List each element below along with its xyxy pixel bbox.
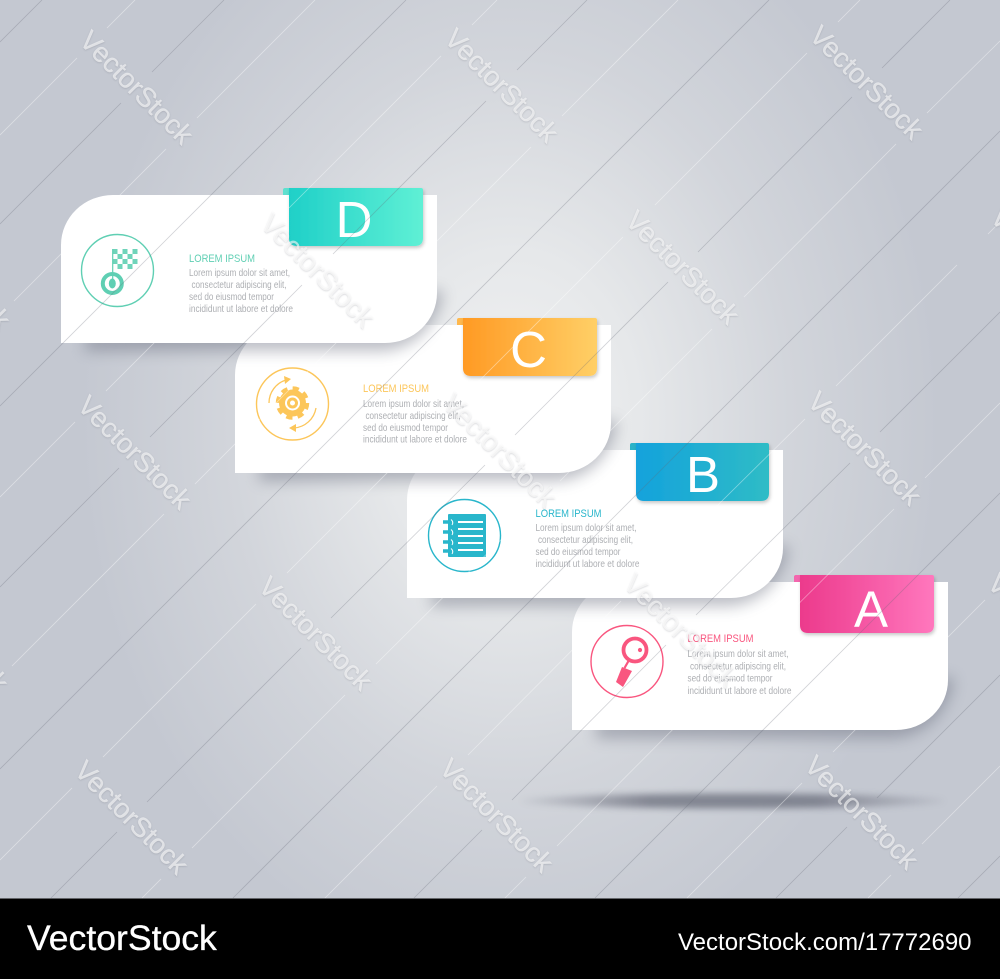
- panel: step D: [61, 188, 443, 351]
- card C shadow: [259, 420, 617, 481]
- text block C: [363, 383, 467, 446]
- footer image id: VectorStock.com/17772690: [678, 929, 972, 956]
- watermarks: VectorStock: [434, 753, 560, 878]
- text block D: Lorem ipsum dolor sit amet,: [189, 267, 290, 279]
- icon: checkered flag: [82, 234, 154, 306]
- text block A: [688, 633, 792, 697]
- watermarks: VectorStock: [802, 386, 928, 511]
- watermarks: VectorStock: [69, 755, 195, 880]
- card D body: [61, 195, 437, 343]
- footer logo: VectorStock: [27, 918, 217, 958]
- floating ground shadow: [521, 794, 945, 808]
- text block B: LOREM IPSUM: [536, 508, 602, 520]
- text block A: incididunt ut labore et dolore: [688, 685, 792, 697]
- watermarks: VectorStock: [439, 23, 565, 148]
- text block C: Lorem ipsum dolor sit amet,: [363, 398, 464, 410]
- tab C: C: [510, 321, 547, 378]
- watermarks: VectorStock: [620, 205, 746, 330]
- text block A: consectetur adipiscing elit,: [690, 660, 786, 672]
- text block B: [536, 508, 640, 570]
- text block D: sed do eiusmod tempor: [189, 291, 274, 303]
- text block A: sed do eiusmod tempor: [688, 672, 773, 684]
- icon: magnifying glass: [591, 626, 663, 698]
- card C body: [235, 325, 611, 473]
- panel: step C: [235, 318, 617, 481]
- text block B: Lorem ipsum dolor sit amet,: [536, 522, 636, 534]
- watermarks: VectorStock: [804, 20, 930, 145]
- card D shadow: [85, 290, 443, 351]
- text block C: LOREM IPSUM: [363, 383, 429, 395]
- card A body: [572, 582, 948, 730]
- watermarks: VectorStock: [72, 390, 198, 515]
- tab A: [794, 575, 934, 638]
- text block C: consectetur adipiscing elit,: [366, 410, 460, 422]
- watermarks: VectorStock: [618, 568, 744, 693]
- text block D: [189, 253, 293, 315]
- text block B: sed do eiusmod tempor: [536, 546, 621, 558]
- watermarks: VectorStock: [253, 571, 379, 696]
- text block C: sed do eiusmod tempor: [363, 422, 448, 434]
- text block D: LOREM IPSUM: [189, 253, 255, 265]
- icon: notebook: [428, 500, 500, 572]
- watermarks: VectorStock: [74, 25, 200, 150]
- text block D: incididunt ut labore et dolore: [189, 303, 293, 315]
- tab B: B: [686, 446, 720, 503]
- panel: step A: [572, 575, 954, 738]
- card A shadow: [596, 677, 954, 738]
- text block C: incididunt ut labore et dolore: [363, 434, 467, 446]
- text block B: consectetur adipiscing elit,: [538, 534, 633, 546]
- tab A: A: [854, 581, 888, 638]
- card B shadow: [431, 545, 789, 606]
- footer bar: [0, 898, 1000, 979]
- watermarks: VectorStock: [255, 208, 381, 333]
- tab D: D: [336, 191, 372, 248]
- tab D: [283, 188, 423, 248]
- text block A: LOREM IPSUM: [688, 633, 754, 645]
- text block D: consectetur adipiscing elit,: [192, 279, 286, 291]
- tab C: [457, 318, 597, 378]
- tab B: [630, 443, 769, 503]
- text block A: Lorem ipsum dolor sit amet,: [688, 648, 788, 660]
- text block B: incididunt ut labore et dolore: [536, 558, 640, 570]
- card B body: [407, 450, 783, 598]
- panel: step B: [407, 443, 789, 606]
- watermarks: VectorStock: [799, 750, 925, 875]
- watermarks: VectorStock: [437, 388, 563, 513]
- icon: gear with arrows: [256, 368, 328, 440]
